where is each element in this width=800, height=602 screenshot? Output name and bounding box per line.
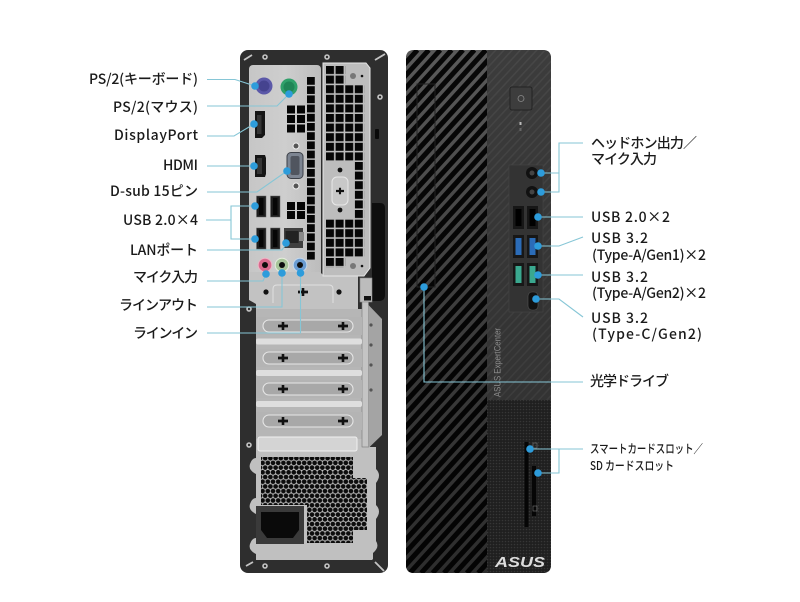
frame screws [247, 55, 382, 568]
labels: front: (Type-A/Gen1)×2 [592, 245, 706, 265]
icon: vent holes grid [287, 66, 364, 268]
icon: power socket [256, 506, 304, 544]
brand text vertical: ASUS ExpertCenter [492, 328, 504, 397]
labels: front: ヘッドホン出力／ [591, 133, 697, 153]
lower textured panel [487, 400, 551, 573]
leaders: front [420, 143, 583, 477]
icon: status LEDs [520, 122, 522, 131]
icon: PS/2 mouse port [280, 78, 298, 96]
I/O recess [509, 165, 543, 312]
icon: LAN port [284, 228, 304, 248]
labels: front: USB 2.0×2 [591, 207, 670, 227]
labels: front: USB 3.2 [591, 228, 648, 248]
labels: front: スマートカードスロット／ [590, 440, 703, 457]
vent: power supply [261, 457, 367, 543]
labels: front [590, 133, 706, 474]
labels: rear: USB 2.0×4 [123, 210, 198, 230]
labels: front: 光学ドライブ [590, 371, 669, 391]
chassis frame [240, 50, 388, 573]
corner marks [244, 54, 385, 571]
icon: front USB ports [513, 206, 538, 310]
cable handle [367, 203, 385, 301]
panel: rear of tower [240, 50, 388, 573]
labels: rear: ラインアウト [119, 295, 198, 315]
leaders: rear [206, 80, 304, 333]
labels: rear [89, 69, 198, 343]
labels: front: USB 3.2 [591, 267, 648, 287]
psu metal [250, 439, 379, 560]
icon: audio jacks [258, 258, 307, 272]
labels: front: SD カードスロット [590, 457, 674, 474]
labels: front: USB 3.2 [591, 308, 648, 328]
icon: USB 2.0 ports [256, 196, 280, 249]
labels: rear: DisplayPort [114, 125, 198, 145]
logo: ASUS: ASUS [494, 555, 545, 571]
clip [360, 278, 372, 302]
labels: rear: LANポート [130, 240, 198, 260]
audio plate holes [263, 285, 342, 303]
panel: front of tower [406, 50, 551, 573]
labels: rear: マイク入力 [133, 267, 198, 287]
icon: D-sub port [287, 143, 303, 189]
right vent panel [323, 63, 370, 276]
labels: front: マイク入力 [591, 149, 657, 169]
striped grille [406, 50, 487, 573]
labels: rear: ラインイン [133, 323, 198, 343]
side rail [362, 290, 368, 447]
icon: audio jacks [526, 167, 538, 198]
labels: rear: PS/2(キーボード) [89, 69, 198, 89]
optical drive outline [417, 84, 435, 287]
expansion slots [256, 317, 362, 451]
labels: front: (Type-C/Gen2) [592, 324, 702, 344]
icon: panel mount [332, 73, 363, 269]
labels: front: (Type-A/Gen2)×2 [592, 283, 706, 303]
icon: PS/2 keyboard port [256, 78, 272, 94]
icon: DisplayPort [255, 111, 265, 138]
labels: rear: PS/2(マウス) [113, 97, 198, 117]
labels: rear: D-sub 15ピン [110, 181, 198, 201]
front base [406, 50, 551, 573]
expansion slot area [256, 309, 362, 439]
labels: rear: HDMI [163, 155, 198, 175]
icon: card slots [524, 442, 537, 527]
audio plate [249, 272, 358, 310]
upper metal plate [249, 65, 321, 277]
upper brushed panel [487, 50, 551, 400]
icon: HDMI [255, 155, 266, 177]
icon: power button [510, 87, 532, 110]
lock slot [375, 129, 379, 139]
